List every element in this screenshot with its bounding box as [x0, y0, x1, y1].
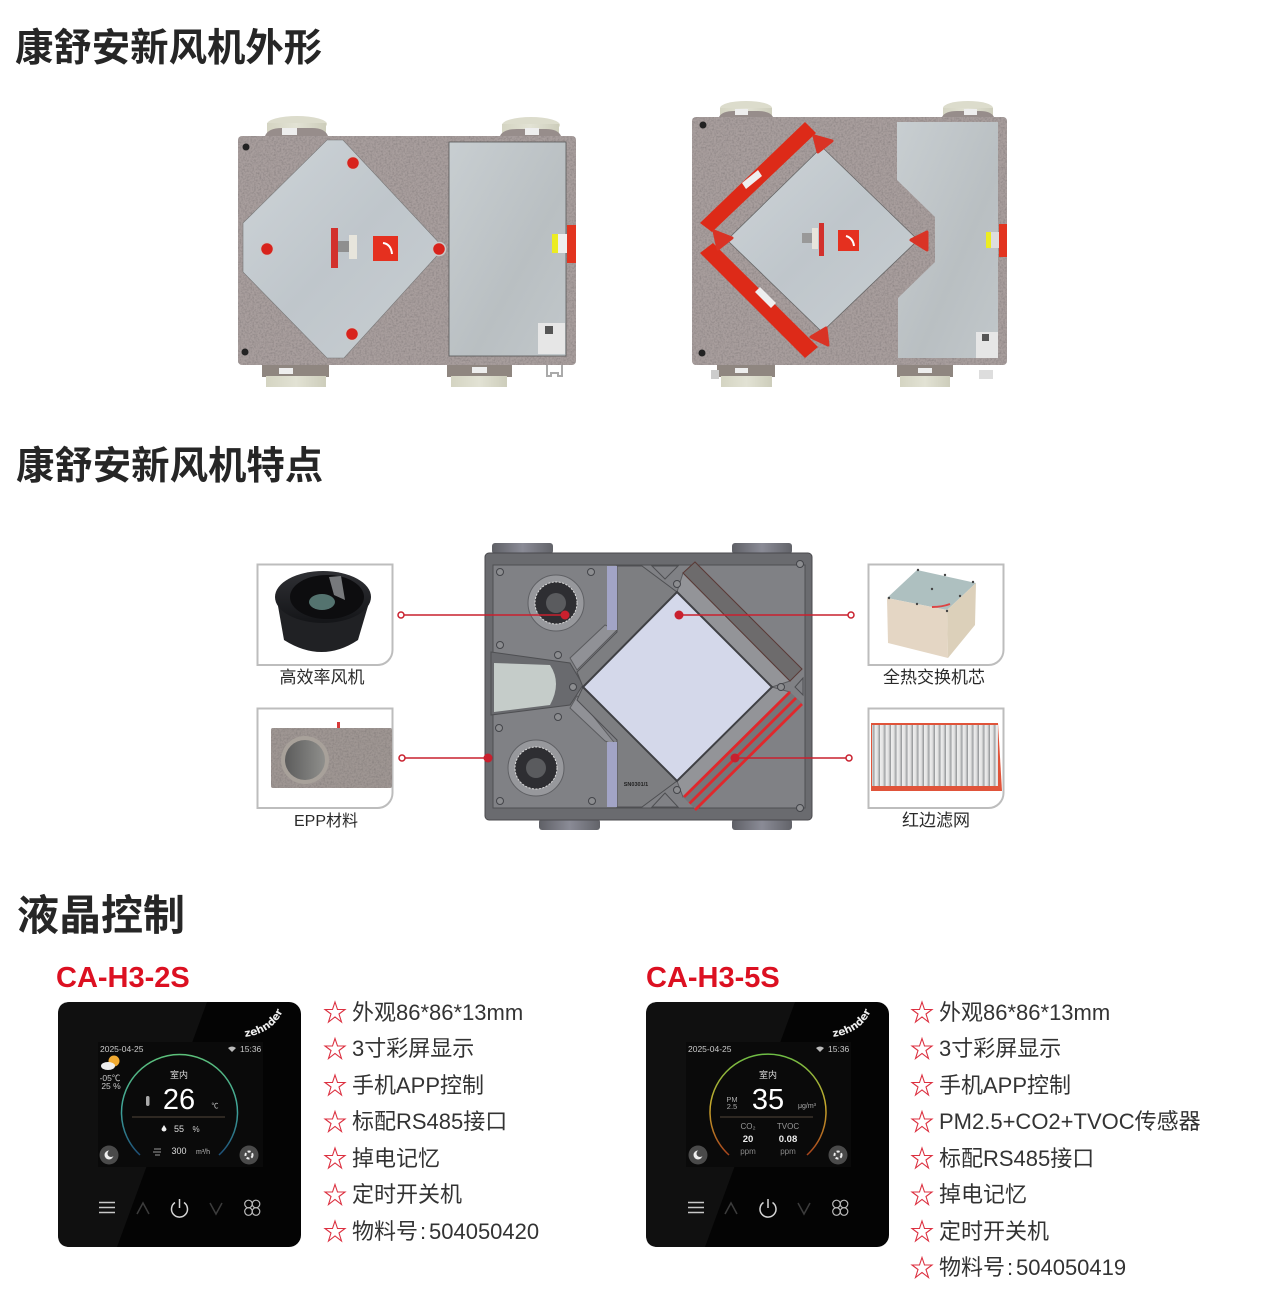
- blower left bottom: [508, 740, 564, 796]
- list text: 3寸彩屏显示: [939, 1036, 1061, 1061]
- readings: m³/h: [196, 1149, 210, 1156]
- side panel: [897, 122, 998, 358]
- gloss: [58, 1002, 207, 1247]
- casing: [485, 553, 812, 820]
- list text: 手机APP控制: [939, 1073, 1071, 1098]
- gauge arc: [122, 1055, 238, 1155]
- frame: [258, 708, 392, 808]
- list text: 504050420: [429, 1219, 539, 1244]
- list text: [352, 1000, 539, 1244]
- product photo: unit with filters open: [692, 101, 1007, 387]
- model name 5S: CA-H3-5S: [646, 962, 780, 994]
- list text: 标配RS485接口: [939, 1146, 1094, 1171]
- casing: [692, 117, 1007, 365]
- control bay: [494, 663, 556, 712]
- status bar: 15:36: [240, 1044, 262, 1054]
- readings: 0.08: [779, 1134, 797, 1145]
- stars: [325, 1002, 345, 1241]
- list text: [939, 1000, 1201, 1280]
- round buttons: [688, 1146, 848, 1164]
- leader: filter: [730, 754, 852, 762]
- panel body: [58, 1002, 301, 1247]
- caption: EPP材料: [294, 812, 358, 830]
- readings: 室内: [759, 1069, 777, 1080]
- top and bottom ducts: [262, 116, 562, 387]
- list text: 物料号:: [939, 1255, 1013, 1280]
- status bar: [100, 1044, 262, 1054]
- panel body: [646, 1002, 889, 1247]
- screw holes: [698, 122, 706, 356]
- leader: fan: [398, 610, 570, 620]
- red filter strips: [700, 122, 818, 358]
- stars: [912, 1002, 932, 1278]
- frame: [868, 708, 1004, 808]
- purple ducts: [607, 566, 617, 807]
- spec list 5S: [912, 1000, 1201, 1280]
- callout: red edge filter: [868, 708, 1004, 830]
- readings: ℃: [212, 1102, 218, 1110]
- diamond plate: [727, 147, 918, 332]
- touch keys: [99, 1199, 260, 1217]
- product photo: front unit closed: [238, 116, 576, 387]
- readings: 35: [752, 1084, 784, 1116]
- filter image: [871, 723, 1002, 791]
- list text: 外观86*86*13mm: [352, 1000, 523, 1025]
- list text: PM2.5+CO2+TVOC传感器: [939, 1109, 1201, 1134]
- readings: [132, 1069, 225, 1156]
- EPP sample: [271, 722, 392, 788]
- brand: zehnder: [244, 1008, 282, 1037]
- readings: ppm: [780, 1147, 796, 1156]
- side access panel: [449, 142, 566, 356]
- readings: [720, 1069, 817, 1156]
- frame: [258, 564, 392, 665]
- cube image: [887, 569, 976, 658]
- list text: 504050419: [1016, 1255, 1126, 1280]
- caption: 高效率风机: [280, 668, 364, 687]
- readings: 2.5: [727, 1102, 737, 1111]
- list text: 物料号:: [352, 1219, 426, 1244]
- list text: 手机APP控制: [352, 1073, 484, 1098]
- list text: 外观86*86*13mm: [939, 1000, 1110, 1025]
- leader: EPP: [399, 754, 492, 762]
- callout: fan photo: [258, 564, 392, 687]
- internal webs and chambers: [491, 566, 803, 807]
- gloss: [646, 1002, 795, 1247]
- filter labels: [742, 170, 776, 308]
- list text: 定时开关机: [939, 1219, 1049, 1244]
- screen area: [98, 1042, 263, 1167]
- readings: PM: [726, 1095, 738, 1104]
- readings: TVOC: [777, 1122, 799, 1131]
- leader: core: [674, 610, 854, 620]
- logo and labels: [331, 225, 576, 354]
- screws: [496, 560, 804, 812]
- red knobs: [260, 156, 446, 340]
- readings: 26: [163, 1084, 195, 1116]
- readings: CO₂: [740, 1122, 756, 1131]
- caption: 红边滤网: [902, 811, 970, 830]
- frame: [868, 564, 1004, 665]
- screw holes: [242, 144, 250, 356]
- upper filter slot: [683, 562, 802, 681]
- internal structure diagram: [485, 543, 812, 830]
- mark text: SN0301/1: [624, 782, 648, 788]
- fan image: [275, 571, 371, 652]
- title: LCD control: 液晶控制: [17, 892, 185, 939]
- status bar: [688, 1044, 850, 1054]
- status bar: 15:36: [828, 1044, 850, 1054]
- leader lines: [398, 610, 854, 762]
- lower red filter: [683, 692, 802, 810]
- callout: heat exchanger core: [868, 564, 1004, 687]
- screen area: [686, 1042, 851, 1167]
- status bar: 2025-04-25: [688, 1044, 732, 1054]
- round buttons: [100, 1146, 258, 1164]
- spec list 2S: [325, 1000, 539, 1244]
- control panel 2S: [58, 1002, 301, 1247]
- gauge arc: [710, 1054, 826, 1155]
- list text: 3寸彩屏显示: [352, 1036, 474, 1061]
- weather: -05℃: [100, 1073, 121, 1083]
- weather: [100, 1056, 121, 1091]
- heat exchanger core: [583, 592, 772, 781]
- list text: 定时开关机: [352, 1182, 462, 1207]
- weather: 25 %: [101, 1081, 121, 1091]
- readings: 300: [171, 1146, 187, 1156]
- readings: 20: [743, 1134, 753, 1145]
- readings: 室内: [170, 1069, 188, 1080]
- list text: 标配RS485接口: [352, 1109, 507, 1134]
- model name 2S: CA-H3-2S: [56, 962, 190, 994]
- blower left top: [528, 575, 584, 631]
- list text: 掉电记忆: [352, 1146, 440, 1171]
- brand: zehnder: [832, 1008, 870, 1037]
- readings: %: [192, 1125, 200, 1134]
- touch keys: [688, 1199, 848, 1217]
- callout: EPP material: [258, 708, 392, 830]
- ducts: [711, 101, 994, 387]
- list text: 掉电记忆: [939, 1182, 1027, 1207]
- control panel 5S: [646, 1002, 889, 1247]
- red triangles: [714, 136, 927, 345]
- status bar: 2025-04-25: [100, 1044, 144, 1054]
- ducts: [492, 543, 792, 830]
- diamond cover plate: [243, 140, 444, 358]
- caption: 全热交换机芯: [883, 668, 985, 687]
- logo and labels: [802, 223, 1007, 358]
- readings: μg/m³: [798, 1103, 817, 1110]
- readings: ppm: [740, 1147, 756, 1156]
- casing: [238, 136, 576, 365]
- readings: 55: [174, 1124, 184, 1134]
- title: features: 康舒安新风机特点: [16, 445, 323, 488]
- title: appearance: 康舒安新风机外形: [15, 27, 322, 70]
